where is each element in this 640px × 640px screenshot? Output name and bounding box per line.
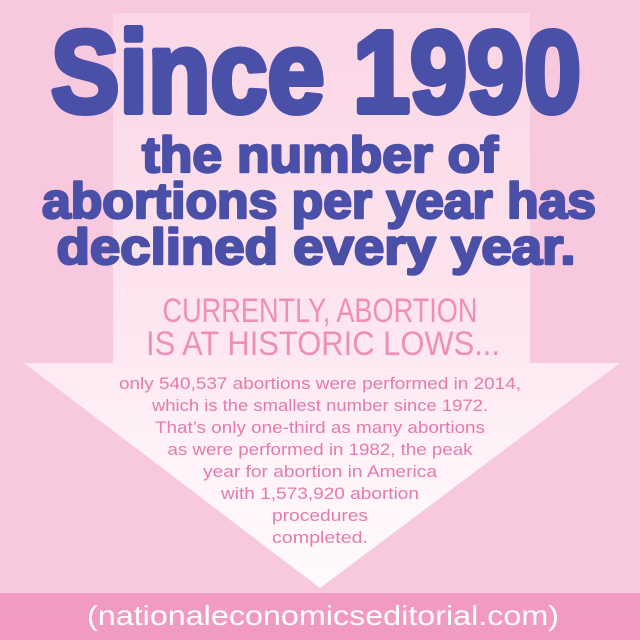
title: Since 1990 — [51, 7, 581, 137]
body text: completed. — [272, 529, 368, 547]
callout heading: CURRENTLY, ABORTION — [162, 292, 478, 330]
body text: procedures — [272, 507, 368, 525]
body text: year for abortion in America — [203, 463, 438, 481]
callout heading — [146, 292, 500, 363]
subtitle — [42, 127, 596, 275]
callout heading: IS AT HISTORIC LOWS... — [146, 325, 500, 363]
body text: with 1,573,920 abortion — [220, 485, 419, 503]
body text — [119, 375, 521, 547]
body text: as were performed in 1982, the peak — [168, 441, 473, 459]
subtitle: abortions per year has — [42, 173, 596, 229]
subtitle: declined every year. — [56, 219, 576, 275]
body text: That’s only one-third as many abortions — [155, 419, 485, 437]
body text: which is the smallest number since 1972. — [151, 397, 488, 415]
footer bar — [0, 593, 640, 640]
subtitle: the number of — [142, 127, 498, 183]
body text: only 540,537 abortions were performed in 2014, — [119, 375, 521, 393]
footer bar: (nationaleconomicseditorial.com) — [87, 600, 559, 631]
